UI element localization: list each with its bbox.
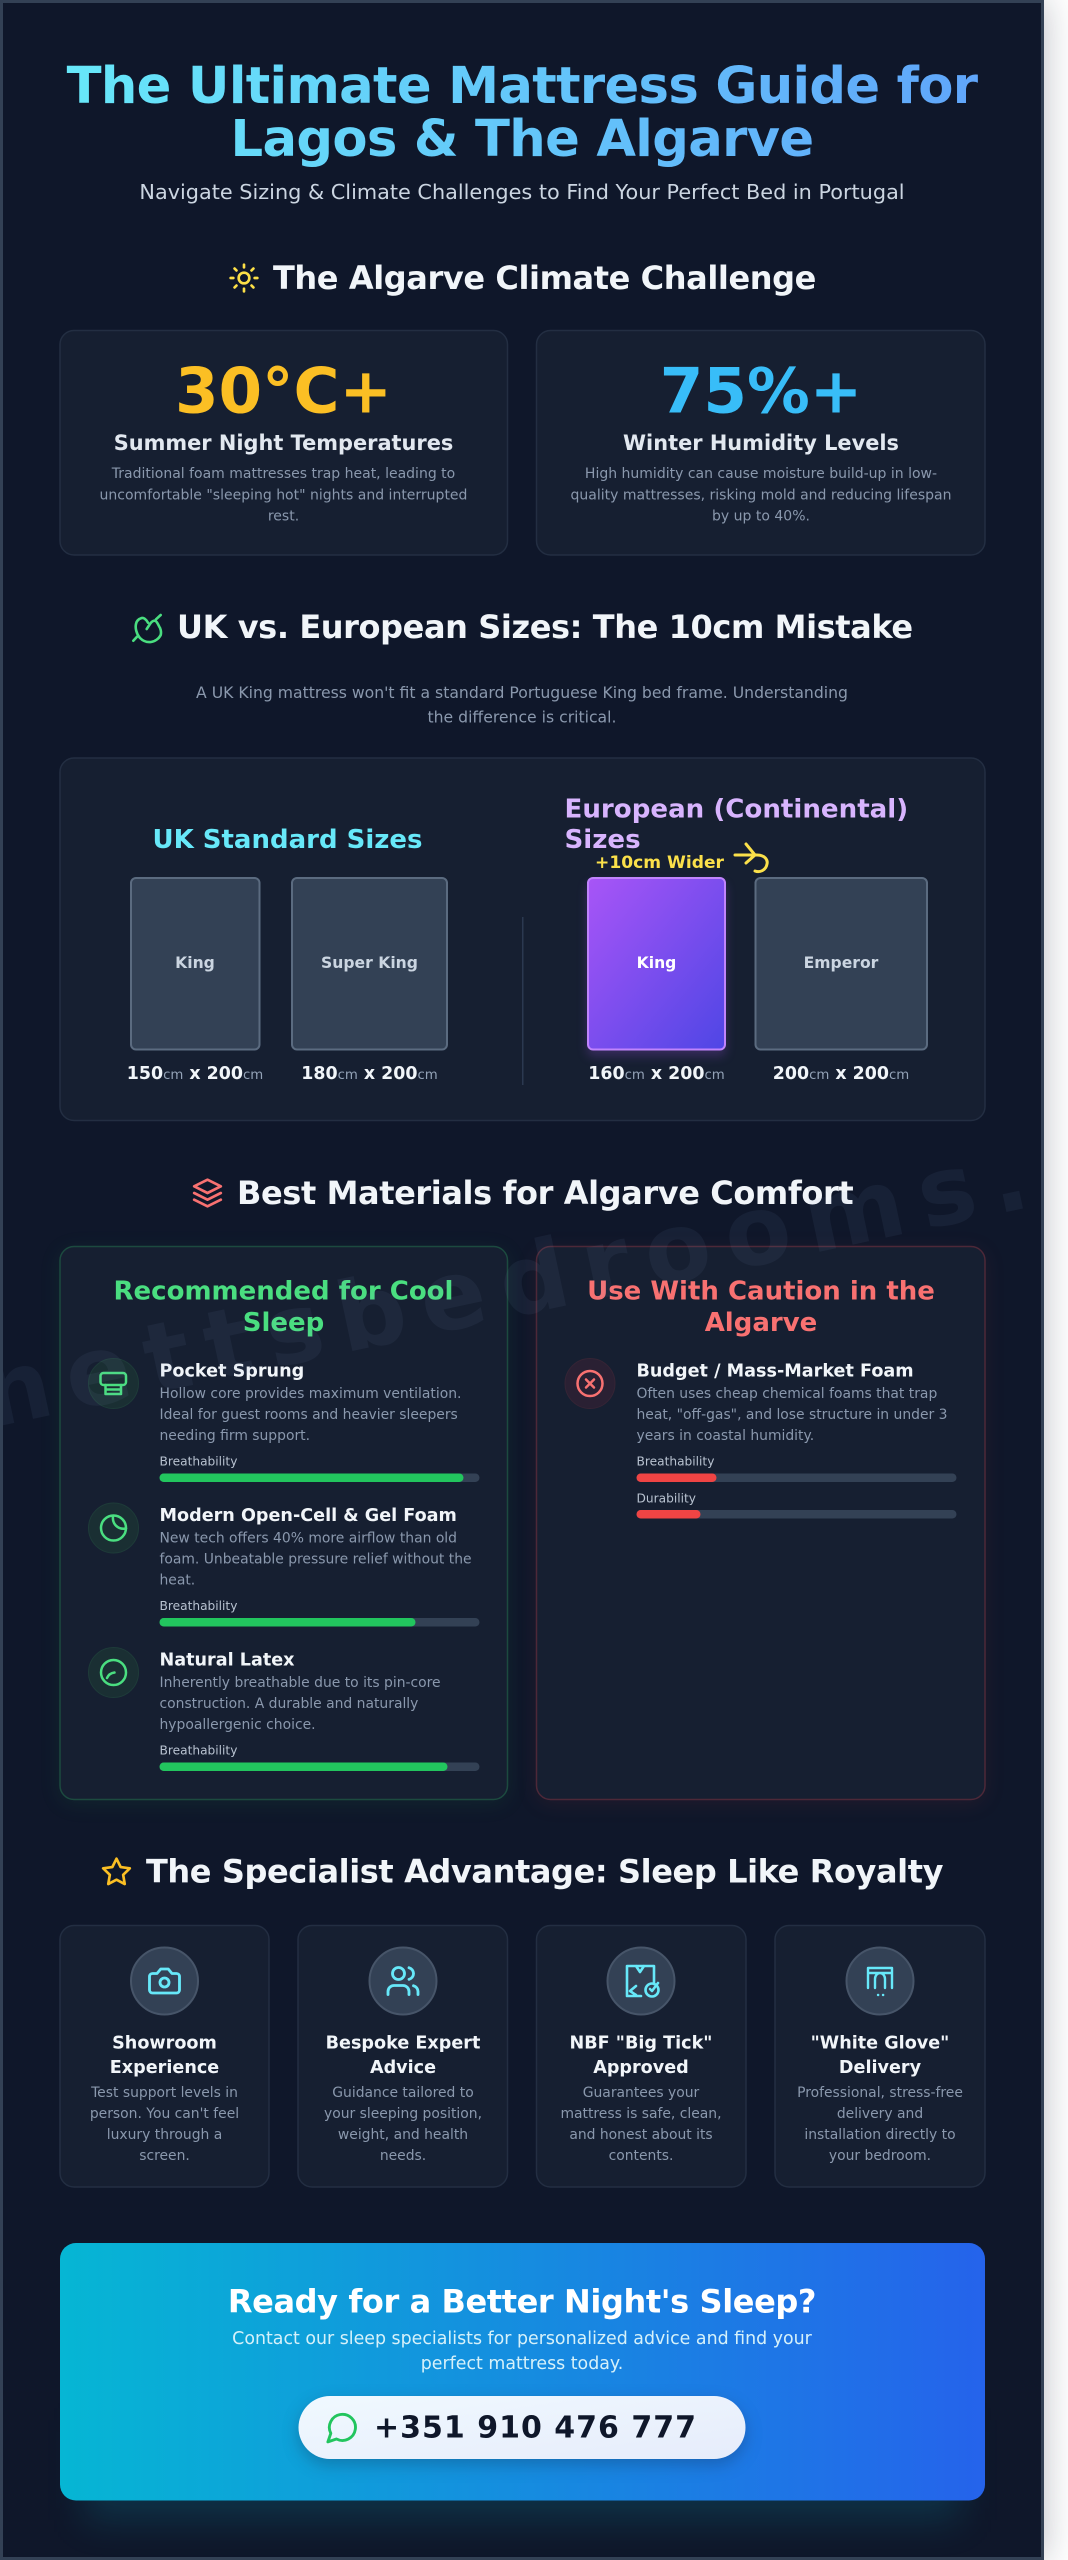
intro text	[196, 683, 848, 726]
icon: arrow	[735, 844, 767, 872]
card: showroom: Test support levels in	[90, 2085, 238, 2101]
section heading: climate: The Algarve Climate Challenge	[273, 259, 816, 297]
icon: glove	[846, 1948, 914, 2014]
material: natural latex: hypoallergenic choice.	[160, 1717, 316, 1733]
card: white glove delivery: "White Glove"	[811, 2034, 949, 2054]
section heading: materials: Best Materials for Algarve Comfort	[237, 1174, 853, 1212]
card: NBF approved: NBF "Big Tick"	[570, 2034, 712, 2054]
UK king: 150cm x 200cm	[127, 1064, 263, 1084]
panel: summer temperature stat	[60, 330, 508, 555]
card: white glove delivery: delivery and	[837, 2106, 923, 2122]
UK super king	[292, 878, 447, 1084]
panel: caution materials: Algarve	[705, 1308, 817, 1338]
icon: tick tablet	[608, 1948, 674, 2014]
card: white glove delivery	[775, 1926, 985, 2187]
EU king	[588, 878, 725, 1084]
card: white glove delivery: installation directly to	[804, 2127, 956, 2143]
card: white glove delivery: Delivery	[839, 2058, 922, 2078]
material: natural latex: Breathability	[160, 1744, 237, 1758]
card: showroom: person. You can't feel	[90, 2106, 239, 2122]
call to action panel: perfect mattress today.	[421, 2354, 623, 2374]
material: gel foam: Breathability	[160, 1599, 237, 1613]
icon: users	[370, 1948, 436, 2014]
material: budget foam: heat, "off-gas", and lose structure in under 3	[636, 1407, 947, 1423]
material: natural latex	[88, 1648, 480, 1771]
call to action panel: Ready for a Better Night's Sleep?	[228, 2282, 816, 2320]
icon: latex	[88, 1648, 138, 1698]
icon: whatsapp bubble	[328, 2414, 355, 2442]
card: bespoke advice: Guidance tailored to	[332, 2085, 474, 2101]
panel: winter humidity stat: High humidity can cause moisture build-up in low-	[585, 466, 937, 482]
panel: winter humidity stat: by up to 40%.	[712, 508, 810, 524]
material: pocket sprung: Hollow core provides maximum ventilation.	[160, 1386, 461, 1402]
panel: summer temperature stat: uncomfortable "sleeping hot" nights and interrupted	[100, 488, 467, 504]
card: NBF approved: contents.	[609, 2148, 673, 2164]
material: budget foam: Often uses cheap chemical foams that trap	[636, 1386, 937, 1402]
card: NBF approved: and honest about its	[569, 2127, 713, 2143]
title: The Ultimate Mattress Guide for	[67, 56, 979, 116]
title	[67, 56, 979, 169]
material: pocket sprung: Breathability	[160, 1454, 237, 1468]
panel: winter humidity stat: 75%+	[660, 354, 862, 428]
card: bespoke advice: Advice	[370, 2058, 436, 2078]
panel: summer temperature stat: rest.	[268, 508, 299, 524]
card: bespoke advice: needs.	[380, 2148, 426, 2164]
card: white glove delivery: your bedroom.	[829, 2148, 931, 2164]
material: pocket sprung: needing firm support.	[160, 1428, 310, 1444]
card: NBF approved: mattress is safe, clean,	[560, 2106, 722, 2122]
material: gel foam	[88, 1503, 480, 1626]
material: budget foam	[565, 1358, 956, 1518]
material: budget foam: Breathability	[636, 1454, 714, 1468]
callout: +10cm wider: +10cm Wider	[595, 853, 725, 873]
UK super king: 180cm x 200cm	[301, 1064, 438, 1084]
panel: recommended materials	[60, 1246, 508, 1800]
panel: recommended materials: Sleep	[243, 1308, 324, 1338]
card: NBF approved: Approved	[593, 2058, 689, 2078]
callout: +10cm wider	[595, 844, 767, 873]
card: showroom: Showroom	[112, 2034, 217, 2054]
European heading: Sizes	[564, 825, 641, 855]
card: showroom: luxury through a	[107, 2127, 222, 2143]
EU emperor	[756, 878, 927, 1084]
EU emperor: 200cm x 200cm	[773, 1064, 909, 1084]
panel: winter humidity stat: quality mattresses, risking mold and reducing lifespan	[571, 488, 951, 504]
panel: summer temperature stat: 30°C+	[175, 354, 392, 428]
material: natural latex: construction. A durable and naturally	[160, 1696, 418, 1712]
panel: winter humidity stat: Winter Humidity Levels	[623, 431, 899, 455]
phone button	[298, 2396, 746, 2459]
UK heading: UK Standard Sizes	[152, 825, 423, 855]
intro text: A UK King mattress won't fit a standard Portuguese King bed frame. Understanding	[196, 683, 848, 702]
UK king	[127, 878, 263, 1084]
material: gel foam: foam. Unbeatable pressure relief without the	[160, 1552, 472, 1568]
title: Lagos & The Algarve	[231, 109, 813, 169]
panel: caution materials: Use With Caution in the	[587, 1276, 935, 1306]
material: gel foam: Modern Open-Cell & Gel Foam	[160, 1506, 457, 1526]
card: showroom: screen.	[139, 2148, 190, 2164]
icon: star	[103, 1859, 130, 1884]
material: budget foam: years in coastal humidity.	[636, 1428, 814, 1444]
card: NBF approved: Guarantees your	[583, 2085, 700, 2101]
European heading: European (Continental)	[564, 794, 908, 824]
panel: summer temperature stat: Traditional foam mattresses trap heat, leading to	[111, 466, 455, 482]
card: showroom: Experience	[110, 2058, 219, 2078]
icon: spring	[88, 1358, 138, 1408]
card: bespoke advice: Bespoke Expert	[326, 2034, 480, 2054]
icon: gel	[88, 1503, 138, 1553]
card: bespoke advice	[298, 1926, 508, 2187]
card: bespoke advice: weight, and health	[338, 2127, 468, 2143]
panel: caution materials	[536, 1246, 985, 1800]
icon: layers	[194, 1180, 221, 1206]
material: budget foam: Budget / Mass-Market Foam	[636, 1362, 914, 1382]
material: pocket sprung	[88, 1358, 480, 1482]
card: showroom	[60, 1926, 269, 2187]
EU emperor: Emperor	[804, 954, 879, 972]
card: white glove delivery: Professional, stress-free	[797, 2085, 963, 2101]
material: budget foam: Durability	[636, 1492, 696, 1506]
icon: ruler apple	[133, 615, 161, 642]
European heading	[564, 794, 908, 855]
call to action panel: Contact our sleep specialists for personalized advice and find your	[232, 2329, 813, 2349]
UK king: King	[175, 954, 215, 972]
material: natural latex: Inherently breathable due to its pin-core	[160, 1675, 441, 1691]
call to action panel	[60, 2243, 985, 2520]
EU king: King	[637, 954, 676, 972]
UK super king: Super King	[321, 954, 418, 972]
material: natural latex: Natural Latex	[160, 1650, 295, 1670]
icon: camera	[131, 1948, 198, 2014]
card: NBF approved	[536, 1926, 746, 2187]
panel: summer temperature stat: Summer Night Temperatures	[114, 431, 453, 455]
intro text: the difference is critical.	[428, 708, 616, 726]
material: gel foam: New tech offers 40% more airflow than old	[160, 1530, 457, 1546]
material: gel foam: heat.	[160, 1572, 195, 1588]
panel: winter humidity stat	[536, 330, 985, 555]
material: pocket sprung: Pocket Sprung	[160, 1362, 304, 1382]
EU king: 160cm x 200cm	[588, 1064, 725, 1084]
panel: recommended materials: Recommended for Cool	[114, 1276, 453, 1306]
section heading: specialist: The Specialist Advantage: Sleep Like Royalty	[146, 1852, 944, 1890]
icon: x circle	[565, 1358, 615, 1408]
card: bespoke advice: your sleeping position,	[324, 2106, 482, 2122]
material: pocket sprung: Ideal for guest rooms and heavier sleepers	[160, 1407, 458, 1423]
subtitle: Navigate Sizing & Climate Challenges to Find Your Perfect Bed in Portugal	[139, 180, 905, 204]
phone button: +351 910 476 777	[374, 2410, 697, 2446]
panel: size comparison	[60, 758, 985, 1120]
icon: sun	[231, 265, 257, 291]
section heading: sizes: UK vs. European Sizes: The 10cm Mistake	[177, 608, 913, 646]
